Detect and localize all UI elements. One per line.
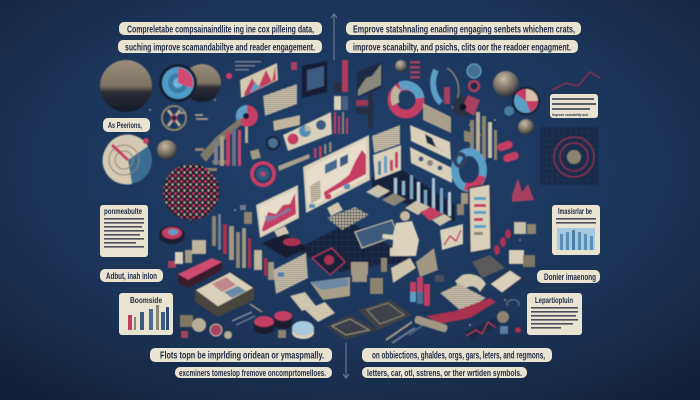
line chart, top right	[552, 72, 600, 90]
keyboard	[327, 207, 369, 230]
pink tube	[414, 315, 448, 333]
label: top right line 2: improve scanabilty, and psichs, clits oor the readoer engagment.	[353, 42, 571, 54]
ring gauge	[252, 163, 274, 185]
left pill 2: Adbut, inah inlon	[106, 271, 157, 281]
monitor stand	[327, 202, 343, 216]
small tile under donut	[461, 193, 468, 204]
small blue disc, mid right	[504, 106, 514, 116]
label: left pill: As Peerions,	[108, 120, 142, 130]
left bar chart box	[119, 293, 173, 335]
right pill: Donier imaenong	[544, 272, 596, 282]
rock sphere, top left	[100, 60, 152, 112]
label: top left line 2: suching improve scamandabiltye and reader engagement.	[125, 42, 315, 54]
small blue disc	[467, 64, 481, 78]
pad cube left	[351, 262, 368, 275]
tablet on desk	[355, 220, 398, 248]
label: bottom right line 2: letters, car, otl, sstrens, or ther wrtiden symbols.	[367, 368, 522, 379]
striped stacks	[290, 277, 350, 322]
blocks, lower centre	[352, 248, 444, 294]
stepped document tiles	[366, 185, 452, 226]
pink stacked bricks	[178, 258, 222, 288]
scatter dots	[149, 99, 531, 326]
loop arrow	[507, 300, 519, 306]
workspace desk	[295, 222, 418, 272]
staircase blocks	[195, 118, 242, 171]
moon sphere	[493, 71, 519, 97]
left text box	[100, 205, 148, 257]
left bar chart box: Boomside	[130, 295, 162, 305]
rock sphere behind pie	[183, 64, 221, 102]
pink bars	[314, 142, 332, 158]
pie chart, right	[512, 87, 540, 115]
large monitor	[303, 135, 370, 216]
label: left pill	[103, 118, 150, 132]
small line chart panel	[465, 318, 498, 340]
dark blueprint sheet	[358, 300, 412, 330]
area chart panel	[357, 62, 382, 98]
small beige panel	[273, 115, 300, 131]
label: bottom left line 1	[150, 348, 332, 362]
text sheet	[440, 284, 486, 312]
text card, lower centre	[273, 253, 308, 294]
label: top right line 1: Emprove statshnaling enading engaging senbets whichem crats,	[353, 24, 575, 36]
right chart box: Imasisrlar be	[558, 207, 592, 216]
dotted sphere	[163, 164, 219, 220]
isometric bars wall	[372, 165, 455, 222]
right small pill box	[550, 94, 598, 118]
bar cluster, centre right	[470, 112, 497, 160]
small bars, upper centre right	[356, 93, 373, 128]
small chart card	[440, 224, 463, 250]
stripe strip	[278, 154, 310, 171]
label: bottom right line 2	[362, 367, 527, 379]
mixed tokens	[180, 315, 286, 339]
keyboard tile	[472, 255, 505, 278]
tall bars, upper centre	[334, 60, 348, 134]
right text box	[527, 293, 582, 335]
tall phone panel	[469, 184, 491, 253]
document panel	[263, 84, 297, 116]
chart card with pies	[283, 112, 332, 151]
label: bottom right line 1: on obbiections, ghaldes, orgs, gars, leters, and regmons,	[372, 350, 545, 362]
donut ring, centre right	[455, 152, 483, 188]
pen tray	[232, 304, 262, 325]
small tiles near bars	[240, 205, 252, 224]
donut chart	[392, 85, 420, 114]
pie strip card	[410, 147, 452, 183]
pink ring	[469, 81, 479, 91]
label: bottom left line 2	[175, 367, 332, 379]
pie on stem	[236, 105, 258, 143]
label: top left line 1	[119, 22, 322, 36]
pink chain links	[494, 229, 511, 255]
text card	[372, 125, 400, 153]
center arrows	[331, 14, 349, 378]
isometric peak chart	[240, 63, 278, 98]
dark table panel	[302, 61, 327, 98]
colored cylinders	[410, 277, 430, 306]
tilted beige panel	[423, 103, 451, 133]
dark top bar group left	[178, 112, 208, 120]
blue and pink radial pie	[159, 64, 197, 102]
arc gauge	[433, 68, 459, 108]
stacked book	[195, 272, 254, 317]
pink peak chart	[512, 178, 534, 202]
tile on right	[457, 204, 464, 215]
pink block	[291, 62, 297, 70]
dark-pink heart panel	[312, 248, 345, 275]
cube stack, right	[509, 222, 536, 267]
left pill 2	[100, 269, 163, 282]
book tile	[490, 270, 522, 293]
label: bottom right line 1	[362, 348, 552, 362]
label: bottom left line 1: Flots topn be imprlding oridean or ymaspmally.	[160, 350, 324, 362]
left text box: ponmeabulte	[104, 207, 142, 216]
bar cluster	[214, 128, 241, 166]
tilted beige tile	[464, 130, 472, 143]
bar field, lower left of centre	[212, 214, 274, 280]
jagged chart card	[410, 125, 451, 160]
small monitor	[256, 185, 299, 238]
pink bar wave	[426, 298, 496, 324]
arch block	[455, 274, 486, 292]
label: bottom left line 2: excminers tomeslop fremove oncomprtomelloes.	[179, 368, 326, 379]
label: top left line 2	[118, 40, 322, 54]
person at desk	[382, 211, 419, 256]
pen set	[386, 320, 430, 343]
label: top left line 1: Compreletabe compsainaindlite ing ine cox pilleing data,	[127, 24, 314, 36]
bar card	[373, 145, 401, 180]
illustration collage	[100, 60, 600, 343]
legend dashes	[410, 61, 420, 78]
pale ball	[395, 60, 407, 72]
small monitor stand	[274, 226, 289, 238]
mini widgets, lower right	[497, 311, 521, 334]
radial grid chart	[540, 127, 598, 185]
small pink dot beside fan	[143, 138, 149, 144]
dial icon	[267, 137, 279, 149]
pink dot	[226, 73, 232, 79]
right chart box	[552, 205, 600, 255]
gear splash	[453, 95, 480, 116]
right small pill box: Improve scanability and	[552, 113, 588, 117]
label: top right line 2	[346, 40, 578, 54]
concentric fan chart	[103, 135, 152, 185]
label: top right line 1	[346, 22, 581, 36]
small text widget	[235, 61, 261, 70]
swirl disc	[159, 226, 185, 244]
pink capsules	[496, 140, 520, 163]
pink drums	[254, 311, 292, 334]
beige ball	[518, 119, 534, 135]
right pill	[537, 270, 600, 283]
small globe	[157, 140, 177, 160]
gauge icon	[162, 106, 186, 130]
beige tile	[250, 149, 261, 160]
dark sheet, bottom	[326, 315, 378, 340]
right text box: Lepartiopluin	[535, 296, 573, 305]
blue cylinder	[292, 321, 314, 339]
cube blocks, lower left	[168, 240, 206, 268]
dark dish panel	[262, 234, 308, 258]
